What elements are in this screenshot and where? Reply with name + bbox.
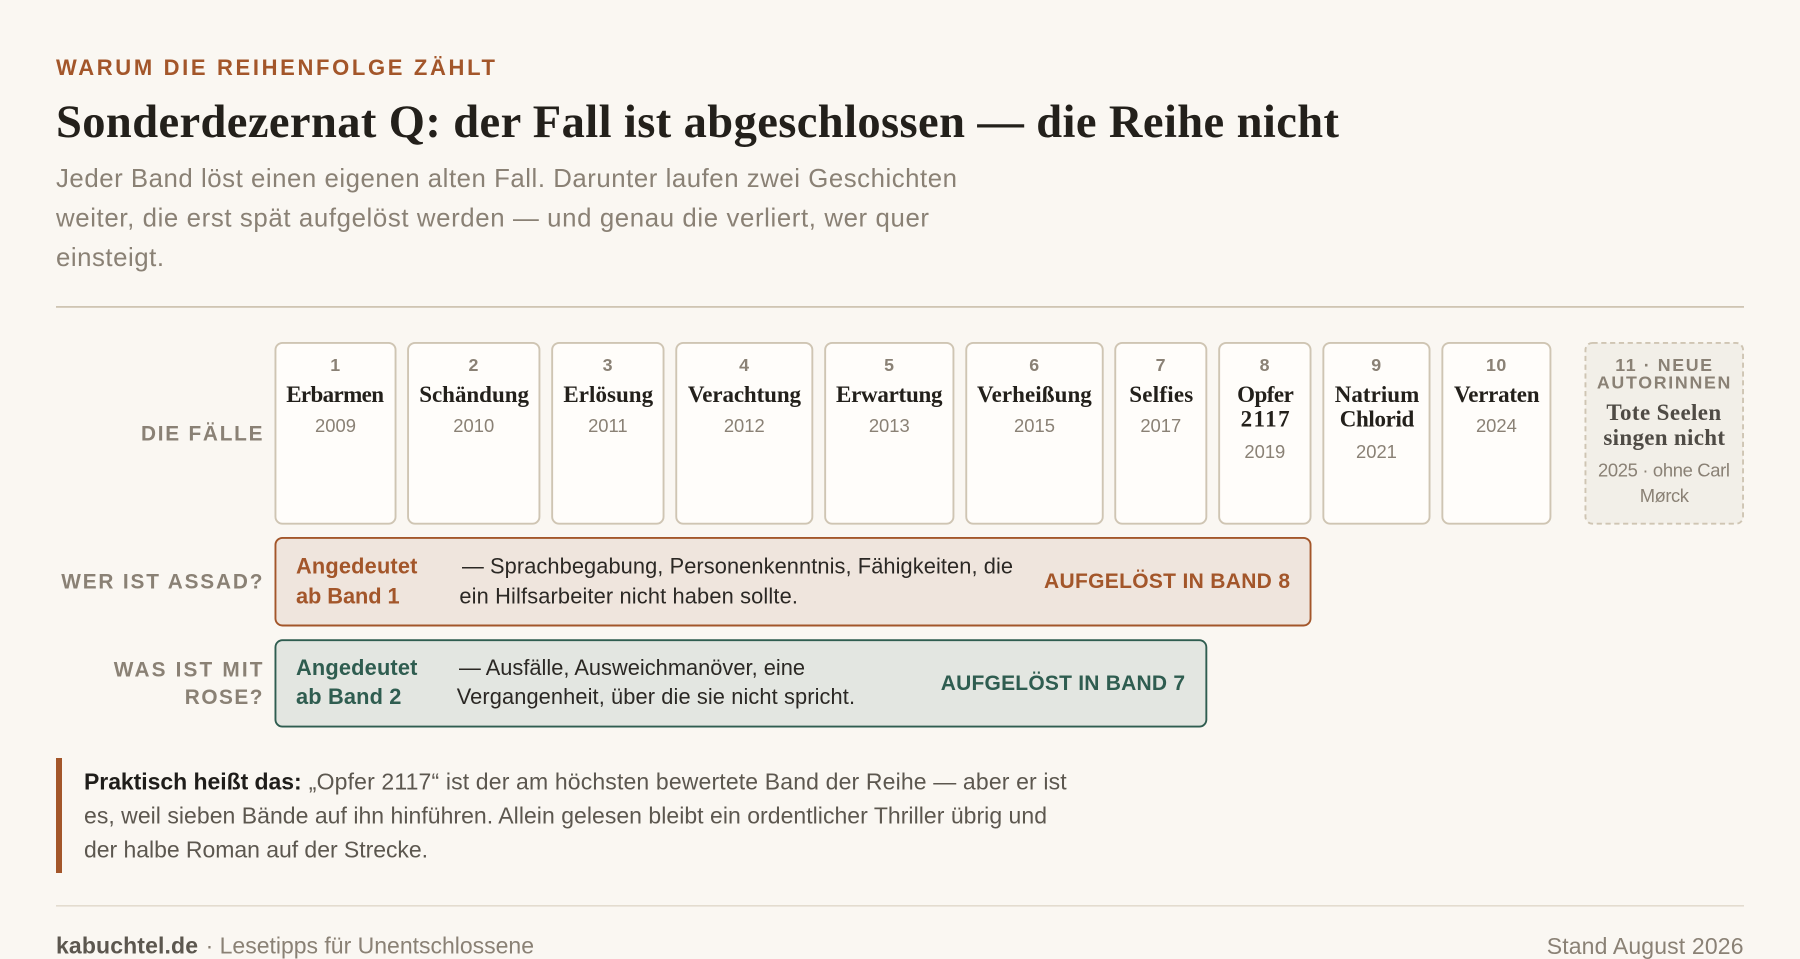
- card 6: 2015: [1014, 415, 1055, 436]
- card 7: 2017: [1140, 415, 1181, 436]
- card 10: Verraten: [1454, 382, 1540, 407]
- card 11: neue Autorinnen: Mørck: [1640, 485, 1690, 506]
- callout: Praktisch heißt das:: [84, 768, 302, 794]
- card 3: Erlösung: [563, 382, 654, 407]
- card 1: 1: [330, 355, 341, 375]
- row label: die Fälle: DIE FÄLLE: [141, 423, 263, 446]
- subtitle: einsteigt.: [56, 244, 164, 272]
- card 5: 2013: [869, 415, 910, 436]
- card 8: 2117: [1241, 407, 1290, 432]
- card 4: 4: [739, 355, 749, 375]
- callout: „Opfer 2117“ ist der am höchsten bewertete Band der Reihe — aber er ist: [309, 768, 1067, 794]
- subtitle: weiter, die erst spät aufgelöst werden — und genau die verliert, wer quer: [55, 204, 929, 232]
- card 8: Opfer: [1237, 382, 1294, 407]
- footer right: Stand August 2026: [1547, 933, 1744, 959]
- card 3: 3: [603, 355, 613, 375]
- card 4: 2012: [724, 415, 765, 436]
- case cards: [275, 343, 1743, 524]
- callout: es, weil sieben Bände auf ihn hinführen. Allein gelesen bleibt ein ordentlicher Thriller übrig und: [84, 802, 1047, 828]
- eyebrow: WARUM DIE REIHENFOLGE ZÄHLT: [56, 55, 496, 80]
- card 1: [275, 343, 396, 524]
- card 1: Erbarmen: [286, 382, 384, 407]
- card 11: neue Autorinnen: Tote Seelen: [1606, 400, 1721, 425]
- callout: der halbe Roman auf der Strecke.: [84, 837, 428, 863]
- card 9: [1323, 343, 1430, 524]
- card 11: neue Autorinnen: singen nicht: [1603, 425, 1725, 450]
- card 4: Verachtung: [688, 382, 802, 407]
- bar: Rose thread: [275, 640, 1206, 727]
- card 8: [1219, 343, 1311, 524]
- footer left: · Lesetipps für Unentschlossene: [206, 932, 534, 958]
- card 10: 2024: [1476, 415, 1517, 436]
- footer left: kabuchtel.de: [56, 932, 198, 958]
- row label: was ist mit Rose: ROSE?: [185, 686, 262, 709]
- card 8: 8: [1260, 355, 1270, 375]
- card 11: neue Autorinnen: 11 · NEUE: [1615, 355, 1712, 375]
- card 4: [676, 343, 812, 524]
- card 11: neue Autorinnen: 2025 · ohne Carl: [1598, 460, 1730, 481]
- callout: [56, 758, 1067, 873]
- title: Sonderdezernat Q: der Fall ist abgeschlossen — die Reihe nicht: [56, 97, 1340, 148]
- card 9: Natrium: [1335, 382, 1419, 407]
- card 5: Erwartung: [836, 382, 943, 407]
- bar: Rose thread: Angedeutet: [296, 655, 417, 680]
- card 6: [966, 343, 1103, 524]
- card 7: 7: [1156, 355, 1166, 375]
- card 11: neue Autorinnen: AUTORINNEN: [1597, 373, 1730, 393]
- bar: Assad thread: AUFGELÖST IN BAND 8: [1044, 570, 1290, 593]
- row label: wer ist Assad: WER IST ASSAD?: [61, 571, 263, 594]
- card 5: [825, 343, 953, 524]
- card 7: Selfies: [1129, 382, 1193, 407]
- card 2: [408, 343, 539, 524]
- card 2: Schändung: [419, 382, 530, 407]
- card 10: [1442, 343, 1550, 524]
- card 3: 2011: [588, 415, 628, 436]
- card 8: 2019: [1244, 441, 1285, 462]
- card 7: [1115, 343, 1206, 524]
- card 2: 2010: [453, 415, 494, 436]
- subtitle: Jeder Band löst einen eigenen alten Fall. Darunter laufen zwei Geschichten: [56, 165, 957, 193]
- bar: Rose thread: ab Band 2: [296, 684, 401, 709]
- card 2: 2: [469, 355, 479, 375]
- card 9: 9: [1371, 355, 1382, 375]
- bar: Assad thread: — Sprachbegabung, Personenkenntnis, Fähigkeiten, die: [462, 553, 1013, 578]
- bar: Assad thread: Angedeutet: [296, 553, 417, 578]
- subtitle: [55, 165, 957, 272]
- footer left: [56, 932, 534, 958]
- bar: Rose thread: AUFGELÖST IN BAND 7: [941, 672, 1185, 695]
- card 5: 5: [884, 355, 894, 375]
- card 9: 2021: [1356, 441, 1397, 462]
- bar: Assad thread: ab Band 1: [296, 583, 400, 608]
- card 6: 6: [1029, 355, 1040, 375]
- card 11: neue Autorinnen: [1585, 343, 1743, 524]
- card 9: Chlorid: [1340, 407, 1415, 432]
- bar: Rose thread: — Ausfälle, Ausweichmanöver, eine: [459, 655, 805, 680]
- bar: Assad thread: ein Hilfsarbeiter nicht haben sollte.: [459, 583, 798, 608]
- bar: Assad thread: [275, 538, 1311, 626]
- card 3: [552, 343, 664, 524]
- bar: Rose thread: Vergangenheit, über die sie nicht spricht.: [457, 684, 855, 709]
- card 10: 10: [1486, 355, 1507, 375]
- card 6: Verheißung: [977, 382, 1092, 407]
- row label: was ist mit Rose: WAS IST MIT: [114, 659, 263, 682]
- card 1: 2009: [315, 415, 356, 436]
- row label: was ist mit Rose: [114, 659, 263, 709]
